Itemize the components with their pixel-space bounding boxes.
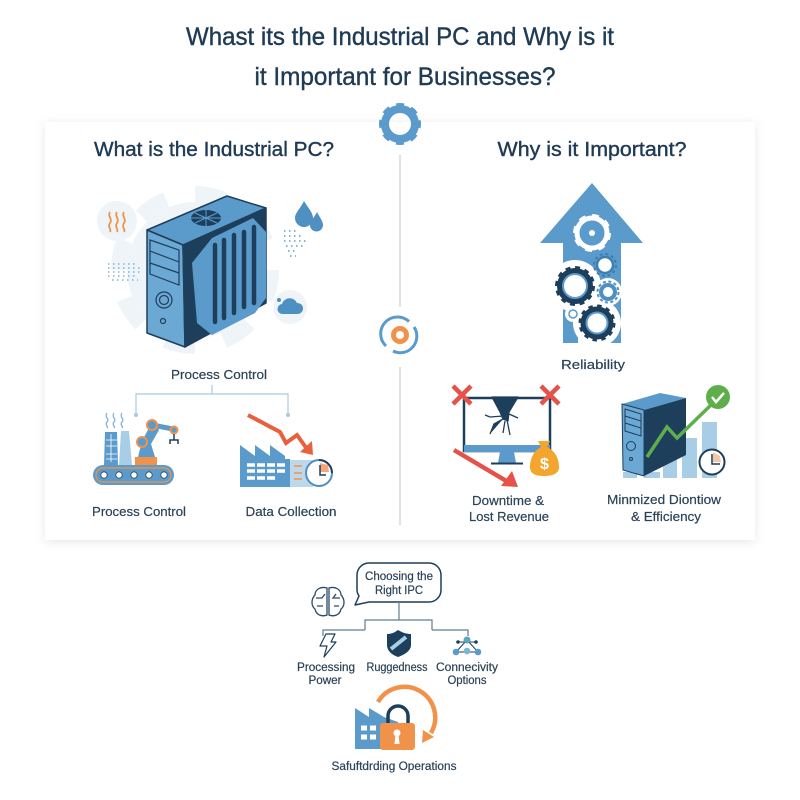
pale gear background xyxy=(119,194,271,346)
title xyxy=(186,23,614,91)
callout: choosing the right IPC: Choosing the xyxy=(365,571,433,583)
padlock xyxy=(380,706,415,750)
red arrow xyxy=(248,415,313,455)
stand xyxy=(498,452,516,463)
cloud badge xyxy=(273,290,307,324)
drive bays xyxy=(150,240,179,285)
red crosses xyxy=(453,386,559,404)
chimneys xyxy=(104,432,118,465)
crack xyxy=(485,397,518,435)
blue gear small xyxy=(594,254,616,276)
icon: center cycle xyxy=(381,317,417,353)
bars xyxy=(623,422,717,478)
illustration: industrial PC xyxy=(97,194,323,347)
money bag: $ xyxy=(540,456,549,473)
robot arm xyxy=(135,420,178,465)
icon: arrow with gears xyxy=(540,183,643,347)
icon: shield xyxy=(387,630,411,657)
icon: factory robot conveyor xyxy=(93,413,178,485)
title: Whast its the Industrial PC and Why is it xyxy=(186,23,614,51)
heading: left panel: What is the Industrial PC? xyxy=(94,139,334,161)
label: ruggedness: Ruggedness xyxy=(366,662,428,674)
tiny gear xyxy=(569,310,577,318)
label: downtime: Downtime & xyxy=(472,493,544,508)
dark gear two xyxy=(580,306,614,340)
label: connectivity options: Options xyxy=(448,675,487,687)
check badge xyxy=(706,385,730,409)
power button xyxy=(156,292,172,324)
red arrow xyxy=(454,450,518,487)
label: lost revenue: Lost Revenue xyxy=(469,509,549,524)
blue arrow xyxy=(540,183,643,343)
label: connectivity options xyxy=(436,662,498,687)
fan xyxy=(191,210,221,226)
label: process control lower: Process Control xyxy=(92,504,186,519)
label: reliability: Reliability xyxy=(561,357,626,372)
clock xyxy=(700,450,724,474)
factory xyxy=(355,708,398,749)
white backing xyxy=(549,260,622,347)
label: safeguarding operations: Safuftdrding Operations xyxy=(332,761,457,773)
water drops xyxy=(295,201,323,232)
label: connectivity options: Connecivity xyxy=(436,662,498,674)
label: processing power xyxy=(297,662,355,687)
label: minimized downtime: Minmized Diontiow xyxy=(607,492,722,507)
dots right xyxy=(284,231,308,256)
smoke xyxy=(106,413,123,428)
icon: top gear xyxy=(382,106,418,142)
callout: choosing the right IPC: Right IPC xyxy=(375,585,423,597)
icon: server with rising trend xyxy=(622,385,730,478)
connector: choice tree xyxy=(323,602,468,636)
icon: factory with falling trend xyxy=(240,415,332,487)
conveyor xyxy=(93,465,174,485)
label: data collection: Data Collection xyxy=(246,504,336,519)
green line xyxy=(647,403,713,457)
vents xyxy=(215,227,254,322)
side face xyxy=(183,208,266,347)
label: efficiency: & Efficiency xyxy=(631,509,702,524)
label: process control: Process Control xyxy=(171,367,267,382)
server xyxy=(622,393,686,476)
icon: broken monitor xyxy=(453,386,559,487)
title: it Important for Businesses? xyxy=(254,63,556,91)
dark gear one xyxy=(556,268,594,304)
dots left xyxy=(108,264,140,280)
heat badge xyxy=(97,201,137,241)
rotating arrow xyxy=(378,687,435,743)
blue gear medium xyxy=(598,282,618,302)
label: processing power: Power xyxy=(308,675,342,687)
panel: main card xyxy=(45,122,755,542)
icon: lightning xyxy=(320,634,336,657)
label: processing power: Processing xyxy=(297,662,355,674)
icon: brain xyxy=(312,587,344,616)
white gear xyxy=(575,216,609,250)
top face xyxy=(147,196,266,245)
icon: factory with lock xyxy=(355,687,435,750)
icon: network xyxy=(453,636,481,655)
clock xyxy=(306,460,332,486)
callout: choosing the right IPC xyxy=(355,563,441,605)
heading: right panel: Why is it Important? xyxy=(498,139,686,161)
front face xyxy=(147,230,185,347)
connector: left tree xyxy=(134,385,290,416)
screen xyxy=(464,398,550,451)
